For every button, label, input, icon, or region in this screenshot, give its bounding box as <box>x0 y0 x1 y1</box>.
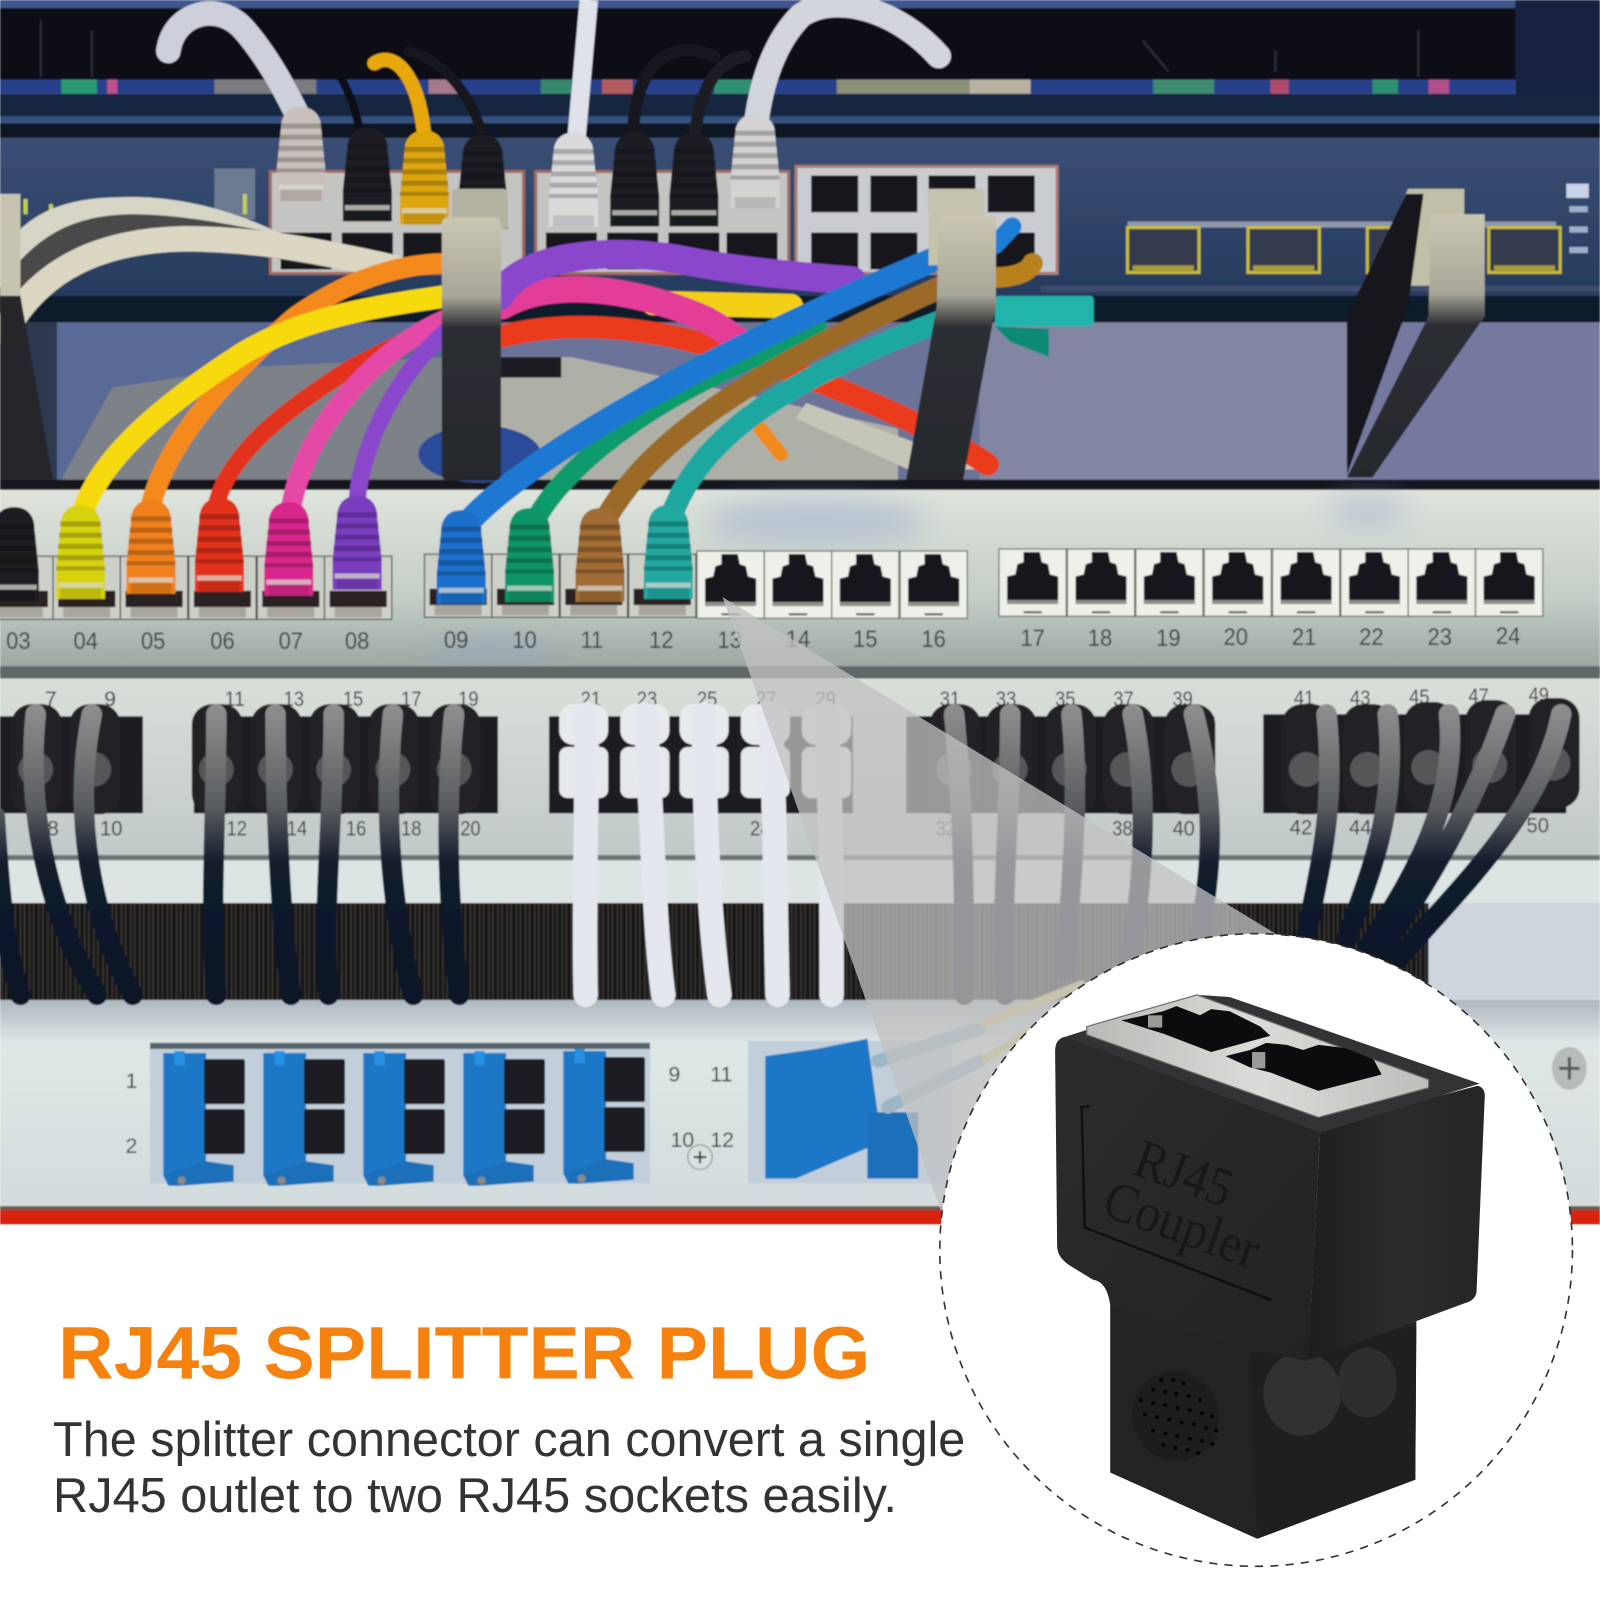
rack row numbers: 44 <box>1349 816 1372 840</box>
top dark brush panel <box>0 0 1600 112</box>
black flat cables <box>0 714 1561 995</box>
rack row numbers: 43 <box>1350 686 1370 710</box>
rack row numbers: 47 <box>1468 684 1489 708</box>
cable management clips <box>0 189 1485 481</box>
port numbers 03-24: 20 <box>1223 624 1248 651</box>
gray bundled cables left <box>5 209 393 332</box>
port numbers 03-24: 09 <box>444 627 468 654</box>
rack row numbers: 27 <box>756 687 777 711</box>
main body left face <box>1055 1037 1320 1361</box>
port numbers 03-24: 17 <box>1020 625 1045 652</box>
white caption area <box>0 1224 1600 1600</box>
rack row numbers: 8 <box>47 817 59 841</box>
rack row numbers: 10 <box>100 817 123 841</box>
description text <box>53 1412 965 1523</box>
blue SC fiber connectors <box>163 1039 918 1186</box>
cable tray band <box>0 286 1600 492</box>
embossed label recess <box>1082 1106 1271 1300</box>
rack row numbers: 41 <box>1294 686 1314 710</box>
lower plug body <box>1110 1296 1416 1539</box>
fiber panel numbers: 9 <box>668 1063 680 1087</box>
port numbers 03-24 <box>6 623 1520 655</box>
rounded recesses on plug <box>1263 1348 1397 1436</box>
port numbers 03-24: 07 <box>279 628 303 655</box>
rack row numbers: 50 <box>1527 814 1549 838</box>
rack row numbers: 45 <box>1409 685 1430 709</box>
rack row numbers: 23 <box>637 687 657 711</box>
keystone ports with patch plugs <box>0 554 696 619</box>
port numbers 03-24: 06 <box>210 628 235 655</box>
port numbers 03-24: 12 <box>649 627 673 654</box>
embossed text <box>1096 1127 1268 1281</box>
rack row numbers: 49 <box>1529 683 1549 707</box>
port numbers 03-24: 18 <box>1088 625 1112 652</box>
rear cable loops behind clips <box>500 227 1094 464</box>
coloured RJ45 plug boots <box>0 496 693 604</box>
port numbers 03-24: 21 <box>1292 624 1316 651</box>
port numbers 03-24: 19 <box>1156 625 1181 652</box>
rack row numbers: 18 <box>401 817 421 841</box>
description text: RJ45 outlet to two RJ45 sockets easily. <box>53 1468 897 1523</box>
rack row numbers: 21 <box>581 687 601 711</box>
switch port banks <box>270 166 1057 273</box>
steel faceplate <box>1087 995 1429 1117</box>
dotted grip pad <box>1120 1359 1231 1473</box>
rack row numbers: 33 <box>996 687 1016 711</box>
fiber panel <box>0 1000 1600 1224</box>
bluish reflections on panel <box>429 496 1408 667</box>
fiber port recesses <box>150 1041 952 1184</box>
port numbers 03-24: 16 <box>921 626 946 653</box>
rack row numbers: 14 <box>287 817 307 841</box>
SFP module slots <box>1128 221 1560 272</box>
rack row numbers: 7 <box>45 687 57 711</box>
port numbers 03-24: 15 <box>853 626 878 653</box>
embossed text: RJ45 <box>1127 1127 1241 1219</box>
white flat cables <box>585 714 832 995</box>
background photo: network rack <box>0 0 1600 1224</box>
callout pointer beam <box>722 597 1276 1219</box>
main body top face <box>1065 995 1480 1133</box>
dark blue chassis rail <box>0 94 1600 139</box>
fiber panel numbers <box>126 1063 734 1169</box>
title: RJ45 SPLITTER PLUG <box>58 1312 870 1395</box>
patch panel 1 <box>0 490 1600 671</box>
fiber panel numbers: 11 <box>710 1063 732 1087</box>
rack row numbers: 16 <box>346 817 366 841</box>
port numbers 03-24: 04 <box>73 628 98 655</box>
rack row numbers: 25 <box>697 687 717 711</box>
rack row numbers: 35 <box>1055 687 1076 711</box>
fiber panel numbers: 1 <box>126 1069 137 1093</box>
black brush strip <box>0 903 1600 1000</box>
right coloured patch cables <box>461 253 949 531</box>
rack row numbers: 29 <box>815 687 836 711</box>
main body right face <box>1308 1086 1485 1359</box>
rack row numbers: 28 <box>750 817 770 841</box>
empty keystone ports 17-24 <box>999 549 1543 616</box>
port numbers 03-24: 08 <box>345 628 369 655</box>
rack row numbers: 19 <box>458 687 479 711</box>
rack row numbers: 15 <box>343 687 363 711</box>
fiber cables <box>878 985 1082 1107</box>
rack row numbers: 13 <box>284 687 304 711</box>
embossed text: Coupler <box>1096 1168 1268 1281</box>
rack row numbers: 31 <box>940 687 960 711</box>
rack row numbers: 17 <box>401 687 421 711</box>
panel shadow divider <box>0 666 1600 904</box>
rack row numbers: 42 <box>1290 816 1312 840</box>
port numbers 03-24: 23 <box>1428 624 1452 651</box>
fiber panel numbers: 10 <box>670 1128 694 1152</box>
port numbers 03-24: 10 <box>512 627 537 654</box>
dashed product circle <box>940 934 1572 1566</box>
top patch cables into switch <box>168 0 939 229</box>
port numbers 03-24: 14 <box>786 626 810 653</box>
rainbow reflection strip <box>0 80 1515 94</box>
port numbers 03-24: 24 <box>1496 623 1520 650</box>
port numbers 03-24: 13 <box>717 627 742 654</box>
network switch body <box>0 138 1600 301</box>
port numbers 03-24: 03 <box>6 628 31 655</box>
left coloured patch cables <box>80 263 449 526</box>
empty keystone ports 13-16 <box>697 551 967 618</box>
fiber panel numbers: 12 <box>710 1128 734 1152</box>
fiber panel numbers: 2 <box>126 1134 137 1158</box>
rack row numbers: 11 <box>224 687 245 711</box>
rack row numbers: 37 <box>1113 687 1134 711</box>
rack row numbers: 40 <box>1172 817 1195 841</box>
rack row numbers: 39 <box>1172 687 1193 711</box>
rack row numbers <box>45 683 1549 841</box>
RJ45 socket openings <box>1121 1006 1382 1091</box>
rack row numbers: 32 <box>936 817 956 841</box>
description text: The splitter connector can convert a single <box>53 1412 965 1467</box>
rack connector blocks <box>0 714 1566 813</box>
rack row numbers: 9 <box>104 687 116 711</box>
port numbers 03-24: 22 <box>1359 624 1384 651</box>
gray-blue lower switch panel <box>0 322 1600 483</box>
port numbers 03-24: 11 <box>581 627 603 654</box>
rack connector hoods <box>11 698 1580 814</box>
rack row numbers: 12 <box>227 817 247 841</box>
switch status lights <box>26 168 1589 250</box>
rack row numbers: 20 <box>460 817 481 841</box>
port numbers 03-24: 05 <box>141 628 165 655</box>
product: RJ45 splitter coupler <box>1055 995 1485 1539</box>
rack row numbers: 38 <box>1112 817 1133 841</box>
